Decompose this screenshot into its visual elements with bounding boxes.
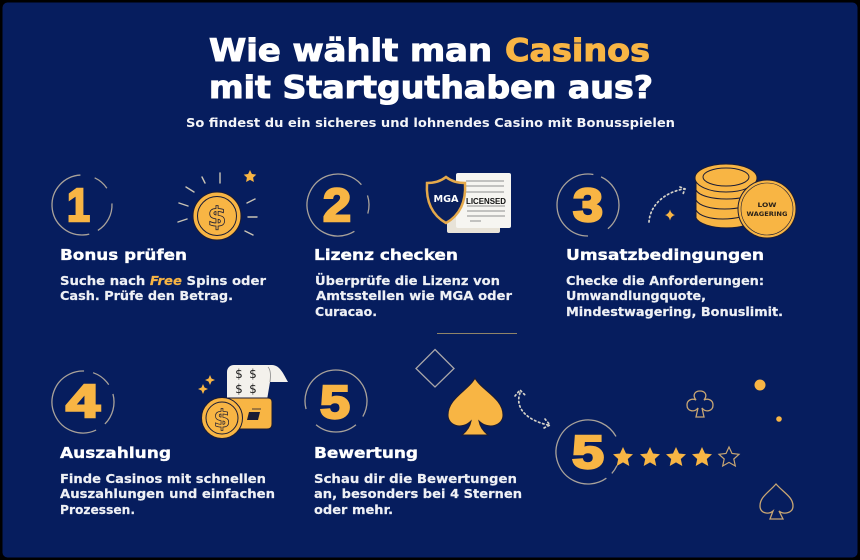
icon: spade outline [760,484,793,519]
decorative gold dots [754,380,782,422]
body text: Cash. Prüfe den Betrag. [60,288,233,303]
rating badge: 5 [572,426,604,478]
number badge 3 [557,174,619,236]
icon: coin stack with low wagering coin: LOW [758,201,776,209]
body text [60,273,267,303]
icon: club outline [687,391,713,417]
icon: receipt, wallet, coin and sparkles: $ [249,367,257,381]
star rating: four of five [613,447,739,466]
rating badge [545,409,631,495]
body text: Curacao. [315,304,377,319]
number badge 5: 5 [320,376,350,428]
number badge 2: 2 [323,179,351,231]
icon: gold coin with rays and star [178,170,257,240]
body text [315,273,513,319]
icon: receipt, wallet, coin and sparkles: $ [249,382,257,396]
heading: Auszahlung [60,444,171,462]
icon: coin stack with low wagering coin: WAGERING [746,210,788,218]
body text: Prozessen. [60,502,135,517]
body text: Umwandlungquote, [566,288,706,303]
body text: Mindestwagering, Bonuslimit. [566,304,783,319]
number badge 4: 4 [66,375,101,427]
body text: Auszahlungen und einfachen [60,486,275,501]
icon: gold spade [448,378,503,435]
icon: MGA shield and licensed document [427,173,511,233]
number badge 3: 3 [573,179,603,231]
number badge 1: 1 [67,179,90,231]
body text [566,273,783,319]
heading: Bewertung [314,444,418,462]
step 5: Bewertung [292,350,550,517]
title: mit Startguthaben aus? [209,70,653,106]
body text: oder mehr. [314,502,393,517]
body text: Finde Casinos mit schnellen [60,471,266,486]
body text: Amtsstellen wie MGA oder [316,288,513,303]
body text: Schau dir die Bewertungen [314,471,517,486]
icon: receipt, wallet, coin and sparkles: $ [235,367,243,381]
icon: dotted arc and sparkle [649,187,685,222]
icon: receipt, wallet, coin and sparkles: $ [214,405,230,433]
rating graphic [545,409,739,495]
title [209,33,653,106]
body text: an, besonders bei 4 Sternen [314,486,522,501]
heading: Bonus prüfen [60,246,187,264]
heading: Lizenz checken [314,246,458,264]
title: Casinos [505,33,650,69]
number badge 2 [299,166,377,244]
icon: dotted arrow [515,390,550,428]
body text: Suche nach Free Spins oder [60,273,267,288]
heading: Umsatzbedingungen [566,246,764,264]
subtitle: So findest du ein sicheres und lohnendes Casino mit Bonusspielen [186,116,675,130]
step 1: Bonus prüfen [50,170,267,303]
number badge 1 [50,173,114,237]
body text: Checke die Anforderungen: [566,273,764,288]
title: Wie wählt man [209,33,492,69]
icon: MGA shield and licensed document: LICENSED [466,196,506,206]
step 3: Umsatzbedingungen [557,164,796,319]
icon: coin stack with low wagering coin [695,164,796,238]
icon: receipt, wallet, coin and sparkles: $ [235,382,243,396]
icon: diamond outline [416,350,454,387]
body text [314,471,522,517]
step 4: Auszahlung [42,361,288,517]
number badge 4 [42,361,124,443]
step 2: Lizenz checken [299,166,513,319]
body text: Überprüfe die Lizenz von [315,273,500,288]
icon: receipt, wallet, coin and sparkles [198,365,288,438]
body text [60,471,275,517]
number badge 5 [292,357,380,445]
icon: MGA shield and licensed document: MGA [434,194,459,205]
icon: gold coin with rays and star: $ [208,202,226,233]
